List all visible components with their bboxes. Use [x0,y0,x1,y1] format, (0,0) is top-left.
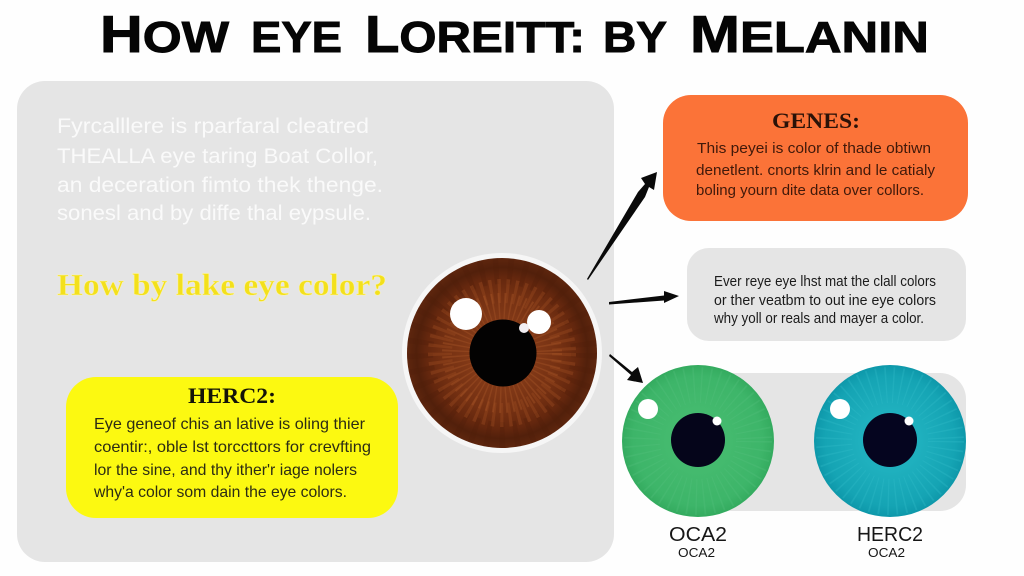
icon: green eye [622,365,774,517]
HERC2 body text: lor the sine, and thy ither'r iage nolers [94,462,357,479]
HERC2 body text: why'a color som dain the eye colors. [93,484,347,501]
heading: question: How by lake eye color? [57,267,387,302]
HERC2 body text [93,416,371,501]
panel: main grey background [17,81,614,562]
GENES heading: GENES: [772,108,860,133]
grey callout body text: why yoll or reals and mayer a color. [713,311,924,327]
green eye highlights [638,399,722,426]
title [100,6,929,64]
GENES body text [696,140,936,199]
label: HERC2 [857,524,923,560]
text block: intro: THEALLA eye taring Boat Collor, [57,145,378,168]
HERC2 body text: Eye geneof chis an lative is oling thier [94,416,366,433]
text block: intro: sonesl and by diffe thal eypsule. [57,202,371,225]
HERC2 body text: coentir:, oble lst torccttors for crevfting [94,439,371,456]
panel: grey callout [687,248,966,341]
brown eye pupil [470,320,536,386]
label: OCA2 [669,524,727,560]
HERC2 heading: HERC2: [188,383,276,408]
arrow: to green eye [609,354,643,383]
panel: GENES callout [663,95,968,221]
title: MELANIN [690,6,929,64]
grey callout body text: Ever reye eye lhst mat the clall colors [714,274,936,290]
icon: brown eye [402,253,602,453]
green eye pupil [671,413,725,467]
teal eye highlights [830,399,914,426]
title: BY [603,13,667,62]
text block: intro: an deceration fimto thek thenge. [57,174,383,197]
title: LOREITT: [365,6,585,64]
GENES body text: boling yourn dite data over collors. [696,182,924,199]
icon: teal eye [814,365,966,517]
label: OCA2: OCA2 [678,545,715,560]
label: HERC2: HERC2 [857,524,923,546]
panel: HERC2 callout [66,377,398,518]
brown eye highlights [450,298,551,334]
arrow: to GENES [587,172,657,280]
grey callout body text: or ther veatbm to out ine eye colors [714,293,936,309]
title: EYE [251,13,342,62]
label: HERC2: OCA2 [868,545,905,560]
GENES body text: denetlent. cnorts klrin and le catialy [696,162,936,179]
label: OCA2: OCA2 [669,524,727,546]
title: HOW [100,6,230,64]
teal eye pupil [863,413,917,467]
text block: intro [57,115,383,225]
panel: grey backing behind small eyes [690,373,966,511]
arrow: to grey callout [609,291,679,304]
text block: intro: Fyrcalllere is rparfaral cleatred [57,115,369,138]
grey callout body text [713,274,936,327]
GENES body text: This peyei is color of thade obtiwn [697,140,931,157]
